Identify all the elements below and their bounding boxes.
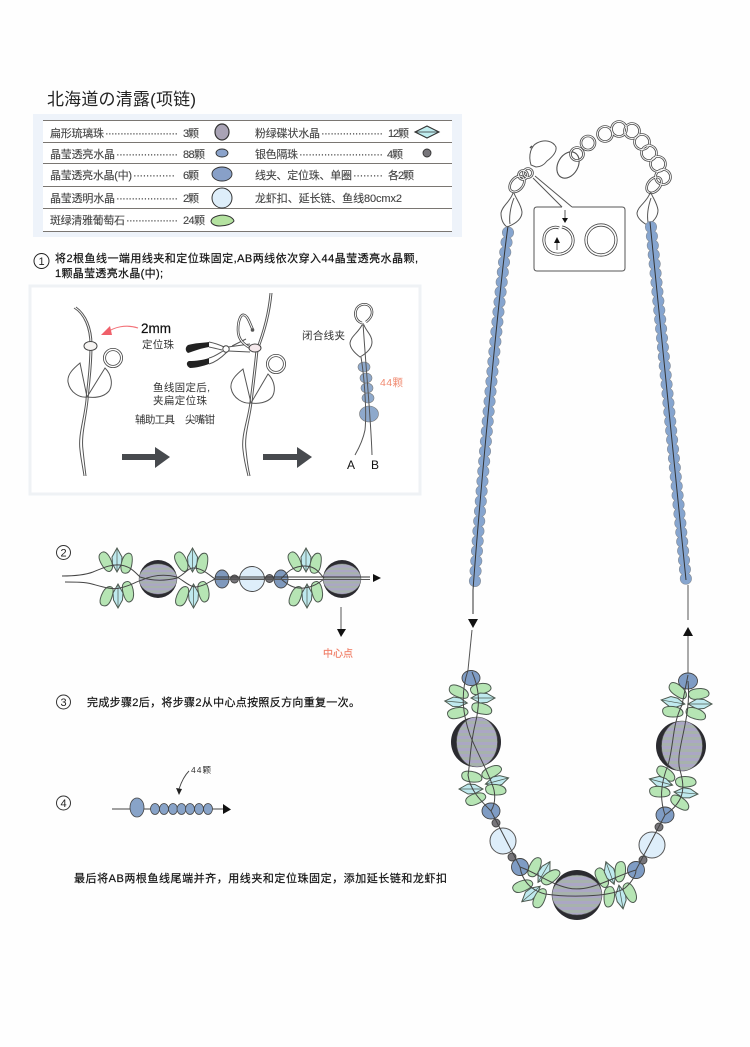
necklace: left bead strand xyxy=(473,226,508,614)
beads centre xyxy=(215,566,288,592)
material row 2 xyxy=(50,147,431,161)
material row 5: ················· xyxy=(126,215,178,227)
label: line A: A xyxy=(347,458,355,472)
note: tool xyxy=(135,413,216,426)
material row 3 xyxy=(50,167,414,182)
step 1 text xyxy=(55,251,418,280)
material row 1: 扁形琉璃珠 xyxy=(50,126,104,140)
step 1 text: 1颗晶莹透亮水晶(中); xyxy=(55,266,163,280)
necklace: clasp and chain xyxy=(501,122,670,227)
necklace: right bead strand xyxy=(650,222,688,620)
threads xyxy=(62,565,370,589)
panel: step 1 diagrams xyxy=(30,286,420,494)
diagram: step 4 bead line xyxy=(112,798,231,817)
left clip xyxy=(501,193,522,227)
icon: pliers xyxy=(186,339,250,368)
material row 1: 粉绿碟状水晶 xyxy=(255,126,320,140)
note: tool: 尖嘴钳 xyxy=(185,413,216,426)
arrow: step two to three xyxy=(263,447,312,468)
material row 4: 2颗 xyxy=(183,192,199,205)
material row 1: ························ xyxy=(105,128,178,140)
closed jump ring xyxy=(586,225,616,255)
material row 2: 4颗 xyxy=(387,148,403,161)
label: 44 beads with arrow: 44颗 xyxy=(191,765,211,775)
material row 3: ············· xyxy=(133,170,175,182)
material row 2: 银色隔珠 xyxy=(255,147,298,161)
label: 2mm crimp bead xyxy=(141,321,174,351)
label: 44 beads: 44颗 xyxy=(380,377,404,389)
arrow: pointing to crimp bead xyxy=(101,326,138,335)
silver spacer beads xyxy=(492,819,663,864)
arrow: left strand joins pendant xyxy=(468,619,478,670)
material row 5: 24颗 xyxy=(183,214,205,227)
label: 44 beads with arrow xyxy=(176,765,211,795)
material row 2: ···················· xyxy=(116,149,178,161)
material row 4: 晶莹透明水晶 xyxy=(50,192,115,205)
note: tool: 辅助工具 xyxy=(135,413,176,426)
material row 4 xyxy=(50,188,402,208)
step 4 number: 4 xyxy=(60,798,67,810)
material row 1: 3颗 xyxy=(183,127,199,140)
material row 1 xyxy=(50,124,439,140)
material row 3: 6颗 xyxy=(183,169,199,182)
material row 5 xyxy=(50,213,234,227)
medium crystals xyxy=(462,670,698,878)
step 3 number: 3 xyxy=(60,697,67,709)
arrow: up into ring xyxy=(554,237,560,250)
step 2 number: 2 xyxy=(60,548,67,560)
diagram: step 2 bead sequence xyxy=(62,548,381,608)
label: centre point: 中心点 xyxy=(323,647,353,660)
step 4 number xyxy=(56,796,70,810)
lobster clasp xyxy=(530,141,556,167)
big bead right xyxy=(323,560,361,598)
leaf cluster 1 xyxy=(96,548,136,608)
step 1 number: 1 xyxy=(38,256,45,268)
material row 2: ··························· xyxy=(299,149,383,161)
big bead left xyxy=(139,560,177,598)
label: closed clip: 闭合线夹 xyxy=(302,329,345,342)
threads xyxy=(463,670,689,896)
arrow: right strand joins pendant xyxy=(683,627,693,673)
leaf cluster 3 xyxy=(285,548,325,608)
leaf cluster 2 xyxy=(172,548,211,608)
step 3 text: 完成步骤2后，将步骤2从中心点按照反方向重复一次。 xyxy=(87,695,360,709)
material row 3: 各2颗 xyxy=(388,168,414,182)
material row 3: ········· xyxy=(353,170,383,182)
material row 3: 晶莹透亮水晶(中) xyxy=(50,168,132,182)
note: flatten crimp bead: 鱼线固定后, xyxy=(153,381,210,394)
material row 4: ···················· xyxy=(116,193,178,205)
final text: 最后将AB两根鱼线尾端并齐，用线夹和定位珠固定，添加延长链和龙虾扣 xyxy=(74,871,447,885)
material row 2: 88颗 xyxy=(183,148,205,161)
diagram: flatten crimp bead xyxy=(231,293,284,476)
arrow: down into ring xyxy=(562,210,568,223)
title: 北海道の清露(项链) xyxy=(47,90,196,109)
step 1 text: 将2根鱼线一端用线夹和定位珠固定,AB两线依次穿入44晶莹透亮水晶颗, xyxy=(55,251,418,265)
material row 5: 斑绿清雅葡萄石 xyxy=(50,213,125,227)
inset: jump ring detail xyxy=(533,176,625,271)
material row 2: 晶莹透亮水晶 xyxy=(50,147,115,161)
arrow: step one to two xyxy=(122,447,170,468)
arrow: to centre point xyxy=(337,607,346,637)
step 3 number xyxy=(56,695,70,709)
necklace: front section xyxy=(444,670,712,920)
extension chain xyxy=(507,122,670,196)
label: line B: B xyxy=(371,458,379,472)
label: 2mm crimp bead: 定位珠 xyxy=(142,338,174,351)
material row 3: 线夹、定位珠、单圈 xyxy=(255,168,352,182)
material row 1: 12颗 xyxy=(388,127,409,140)
label: 2mm crimp bead: 2mm xyxy=(141,321,171,336)
right clip xyxy=(637,193,658,225)
large flat glass beads xyxy=(451,717,706,920)
step 2 number xyxy=(56,546,70,560)
crystal and stone clusters xyxy=(444,680,712,910)
material row 4: 龙虾扣、延长链、鱼线80cmx2 xyxy=(255,191,402,205)
diagram: crimp bead on line xyxy=(68,307,122,476)
open jump ring xyxy=(544,227,573,254)
material row 1: ···················· xyxy=(321,128,383,140)
note: flatten crimp bead: 夹扁定位珠 xyxy=(153,394,208,407)
step 1 number xyxy=(34,254,49,268)
note: flatten crimp bead xyxy=(153,381,210,407)
panel: materials table xyxy=(33,114,462,237)
diagram: closed clip with beads xyxy=(350,304,378,455)
clear crystals xyxy=(490,828,665,858)
arrowhead xyxy=(373,574,381,582)
